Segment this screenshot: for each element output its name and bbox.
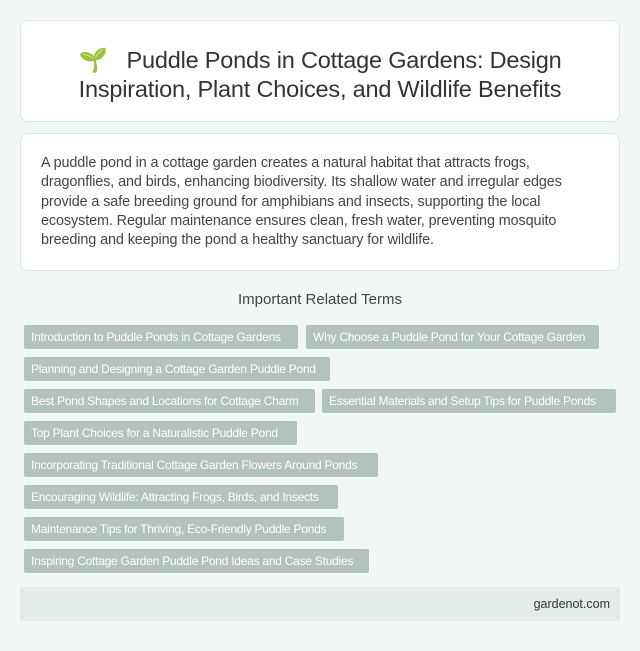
summary text: breeding and keeping the pond a healthy sanctuary for wildlife. [41,232,434,248]
footer: gardenot.com [534,597,610,611]
tags: Top Plant Choices for a Naturalistic Puddle Pond [31,426,278,440]
tags: Encouraging Wildlife: Attracting Frogs, Birds, and Insects [31,490,319,504]
tags: Essential Materials and Setup Tips for Puddle Ponds [329,394,596,408]
tags: Inspiring Cottage Garden Puddle Pond Ideas and Case Studies [31,554,353,568]
heading: related terms: Important Related Terms [238,291,402,308]
title card: 🌱 Puddle Ponds in Cottage Gardens: Design [78,47,562,73]
tags: Best Pond Shapes and Locations for Cottage Charm [31,394,299,408]
tags: Incorporating Traditional Cottage Garden Flowers Around Ponds [31,458,357,472]
footer [20,587,620,621]
tags: Maintenance Tips for Thriving, Eco-Friendly Puddle Ponds [31,522,326,536]
summary text: ecosystem. Regular maintenance ensures clean, fresh water, preventing mosquito [41,213,556,229]
tags: Why Choose a Puddle Pond for Your Cottage Garden [313,330,585,344]
summary text: A puddle pond in a cottage garden creates a natural habitat that attracts frogs, [41,155,530,171]
title card: Inspiration, Plant Choices, and Wildlife Benefits [79,76,561,102]
summary text: dragonflies, and birds, enhancing biodiversity. Its shallow water and irregular edges [41,174,562,190]
tags: Introduction to Puddle Ponds in Cottage Gardens [31,330,281,344]
summary text [20,133,620,271]
summary text: provide a safe breeding ground for amphibians and insects, supporting the local [41,194,540,210]
tags: Planning and Designing a Cottage Garden Puddle Pond [31,362,316,376]
title card [20,20,620,122]
